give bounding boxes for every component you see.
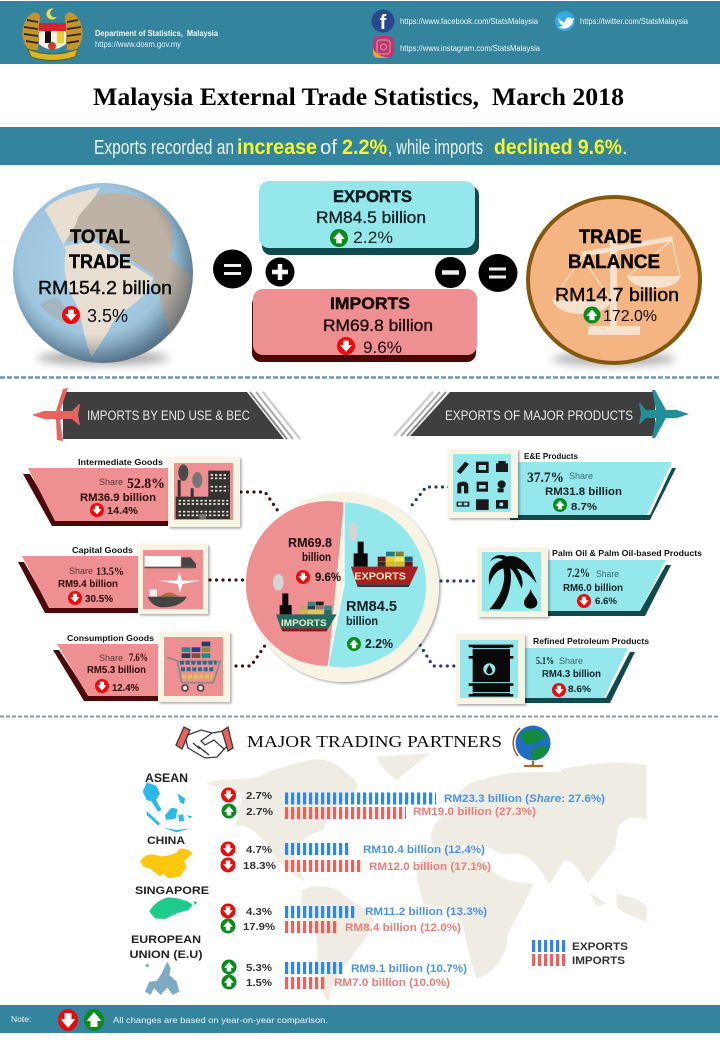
panel: intermediate goods: Share <box>99 477 123 487</box>
panel: palm oil products: 6.6% <box>595 596 618 607</box>
world map background <box>207 753 647 1002</box>
exports banner <box>394 390 689 438</box>
China change: 18.3% <box>243 860 277 872</box>
palm oil text: Palm Oil & Palm Oil-based Products <box>552 548 702 558</box>
panel: imports: RM69.8 billion <box>323 317 433 335</box>
trade balance value: RM14.7 billion <box>555 285 679 305</box>
icon: desk globe <box>513 726 550 766</box>
imports slice value: RM69.8 <box>288 535 332 550</box>
icon: imports ship <box>273 574 337 631</box>
imports slice value <box>288 535 341 584</box>
China change <box>220 842 277 872</box>
ASEAN bars <box>285 798 436 813</box>
China map <box>140 848 193 878</box>
headline band: , while imports <box>388 137 483 159</box>
E&E products text: E&E Products <box>524 451 578 461</box>
headline band: of <box>320 137 337 159</box>
Singapore change: 4.3% <box>246 906 273 918</box>
EU change: 5.3% <box>246 962 273 974</box>
icon: down arrow <box>58 1009 78 1031</box>
consumption goods text: Consumption Goods <box>67 633 154 643</box>
Singapore map <box>149 897 197 919</box>
total trade value: RM154.2 billion <box>38 278 172 298</box>
China import value: RM12.0 billion (17.1%) <box>369 861 491 873</box>
footer note bar <box>0 1005 720 1033</box>
EU change: 1.5% <box>246 977 273 989</box>
panel: refined petroleum products: 8.6% <box>568 684 592 695</box>
refined petroleum icon <box>456 634 525 704</box>
China bars <box>285 849 362 866</box>
panel: intermediate goods <box>23 457 240 527</box>
Singapore import value: RM8.4 billion (12.0%) <box>345 922 461 934</box>
icon: instagram <box>373 36 394 58</box>
panel: imports: 9.6% <box>363 339 402 357</box>
panel: refined petroleum products: 5.1% <box>536 655 554 667</box>
heading: major trading partners <box>176 726 550 766</box>
row: ASEAN <box>143 773 605 832</box>
exports slice value <box>346 599 397 651</box>
Singapore values: RM11.2 billion (13.3%) <box>365 906 487 918</box>
ASEAN change <box>221 788 274 818</box>
panel: palm oil products: RM6.0 billion <box>563 583 623 594</box>
Singapore change <box>220 904 276 934</box>
globe land <box>40 188 191 357</box>
panel: E&E products: Share <box>569 471 593 481</box>
panel: consumption goods <box>53 632 230 702</box>
total trade change <box>62 306 128 326</box>
trade balance change <box>584 306 657 325</box>
panel: palm oil products: 7.2% <box>567 565 590 580</box>
EU import value: RM7.0 billion (10.0%) <box>334 977 450 989</box>
panel: consumption goods: Share <box>99 653 123 663</box>
icon: handshake <box>176 727 233 758</box>
legend: IMPORTS <box>572 955 625 967</box>
refined petroleum text: Refined Petroleum Products <box>533 636 649 646</box>
panel: total trade globe <box>13 183 193 365</box>
icon: exports ship: EXPORTS <box>354 571 406 582</box>
headline band <box>0 127 720 165</box>
panel: exports: EXPORTS <box>333 187 412 206</box>
trade balance change: 172.0% <box>603 308 657 325</box>
capital goods text: Capital Goods <box>72 545 133 555</box>
panel: consumption goods: 12.4% <box>112 683 139 694</box>
ASEAN import value: RM19.0 billion (27.3%) <box>413 806 536 818</box>
title: Malaysia External Trade Statistics, March 2018 <box>93 82 624 111</box>
panel: refined petroleum products: Share <box>559 656 583 666</box>
headline band: increase <box>237 136 317 159</box>
exports slice value: RM84.5 <box>346 599 397 615</box>
panel: capital goods: 13.5% <box>96 564 124 578</box>
panel: exports <box>259 181 479 255</box>
headline band: declined 9.6% <box>494 136 622 159</box>
icon: up arrow <box>84 1009 104 1031</box>
EU bars <box>285 968 343 983</box>
instagram url: https://www.instagram.com/StatsMalaysia <box>400 44 541 53</box>
panel: palm oil products <box>478 548 702 617</box>
intermediate goods icon <box>168 457 240 527</box>
panel: capital goods: Share <box>69 566 93 576</box>
EU label: EUROPEAN <box>131 934 201 946</box>
ASEAN map <box>143 782 193 832</box>
connector dots <box>210 487 476 666</box>
imports banner text: IMPORTS BY END USE & BEC <box>87 408 250 423</box>
total trade label: TOTAL <box>70 227 130 248</box>
icon: facebook <box>372 10 394 34</box>
panel: E&E products: RM31.8 billion <box>545 486 622 498</box>
panel: refined petroleum products: RM4.3 billion <box>542 669 601 680</box>
panel: consumption goods: 7.6% <box>129 652 148 664</box>
panel: capital goods <box>18 544 208 614</box>
headline band: Exports recorded an <box>94 137 234 159</box>
EU map <box>145 962 179 995</box>
panel: refined petroleum products <box>456 634 649 704</box>
icon: national emblem <box>22 8 83 60</box>
imports slice value: billion <box>302 552 331 564</box>
icon: teal plane <box>639 390 689 438</box>
icon: red plane <box>32 388 80 441</box>
exports banner text: EXPORTS OF MAJOR PRODUCTS <box>445 408 633 423</box>
China change: 4.7% <box>246 844 273 856</box>
trade balance label: TRADE <box>579 227 642 248</box>
row: China <box>140 835 485 878</box>
legend <box>532 941 628 967</box>
icon: imports ship: IMPORTS <box>281 618 327 628</box>
consumption goods icon <box>158 632 230 702</box>
panel: palm oil products: Share <box>596 569 619 579</box>
pie chart <box>246 492 439 682</box>
imports banner <box>32 388 300 441</box>
Singapore bars <box>285 912 356 927</box>
department url: https://www.dosm.gov.my <box>95 39 182 49</box>
ASEAN values: RM23.3 billion ( Share: 27.6%) <box>444 793 605 805</box>
twitter url: https://twitter.com/StatsMalaysia <box>580 17 689 26</box>
panel: E&E products <box>448 449 676 520</box>
panel: intermediate goods: 52.8% <box>127 476 165 492</box>
panel: exports: 2.2% <box>353 229 393 247</box>
capital goods icon <box>138 544 208 614</box>
imports slice value: 9.6% <box>315 572 341 584</box>
panel: exports: RM84.5 billion <box>316 209 426 227</box>
footer text: All changes are based on year-on-year comparison. <box>113 1015 328 1025</box>
headline band: . <box>622 137 628 159</box>
icon: minus <box>435 257 466 288</box>
icon: facebook: f <box>380 12 387 34</box>
facebook url: https://www.facebook.com/StatsMalaysia <box>400 17 539 26</box>
icon: balance scale <box>552 236 681 335</box>
total trade change: 3.5% <box>87 306 128 326</box>
heading text: MAJOR TRADING PARTNERS <box>247 732 502 751</box>
panel: intermediate goods: 14.4% <box>107 505 139 517</box>
China label: CHINA <box>147 835 185 847</box>
panel: imports: IMPORTS <box>330 294 410 313</box>
intermediate goods text: Intermediate Goods <box>78 457 163 467</box>
ASEAN change: 2.7% <box>246 806 274 818</box>
Singapore change: 17.9% <box>243 921 276 933</box>
EU change <box>222 960 273 990</box>
ASEAN change: 2.7% <box>246 790 273 802</box>
white plate behind globe <box>505 727 561 772</box>
icon: exports ship <box>349 522 418 587</box>
panel: E&E products: 37.7% <box>527 470 564 486</box>
panel: trade balance: BALANCE <box>568 252 660 273</box>
ASEAN label: ASEAN <box>145 773 188 785</box>
legend: EXPORTS <box>572 941 628 953</box>
palm oil icon <box>478 548 548 617</box>
panel: total trade globe: TRADE <box>69 252 131 273</box>
icon: plus <box>266 258 294 286</box>
Singapore label: SINGAPORE <box>135 885 209 897</box>
panel: intermediate goods: RM36.9 billion <box>80 492 156 504</box>
exports slice value: 2.2% <box>365 637 393 651</box>
panel: consumption goods: RM5.3 billion <box>87 665 146 676</box>
icon: equals left <box>213 250 252 288</box>
icon: equals right <box>478 254 518 292</box>
row: European Union <box>130 934 467 995</box>
panel: trade balance <box>528 197 700 366</box>
panel: E&E products: 8.7% <box>571 501 598 513</box>
row: Singapore <box>135 885 487 934</box>
E&E products icon <box>448 449 518 518</box>
header bar <box>0 1 720 64</box>
panel: capital goods: 30.5% <box>85 594 113 605</box>
EU values: RM9.1 billion (10.7%) <box>351 963 467 975</box>
panel: imports <box>252 289 477 362</box>
footer note bar: Note: <box>11 1014 31 1024</box>
headline band: 2.2% <box>342 136 387 159</box>
EU label line two: UNION (E.U) <box>130 949 203 961</box>
exports slice value: billion <box>346 614 378 628</box>
icon: twitter <box>555 11 575 31</box>
China values: RM10.4 billion (12.4%) <box>363 844 485 856</box>
panel: capital goods: RM9.4 billion <box>58 579 118 590</box>
department name: Department of Statistics, Malaysia <box>95 29 219 38</box>
